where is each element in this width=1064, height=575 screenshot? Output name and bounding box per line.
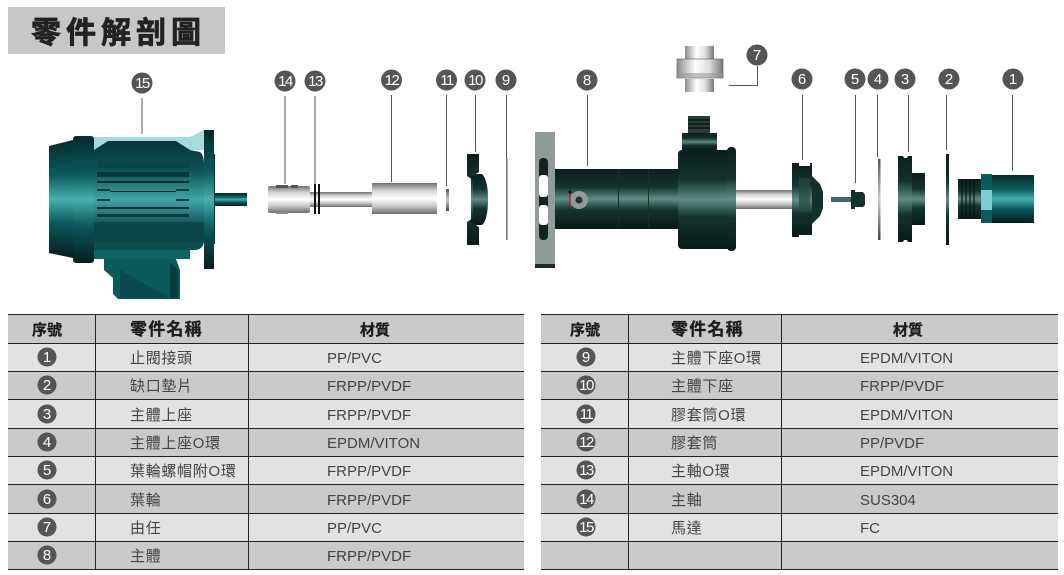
number badges: 9 (502, 72, 510, 89)
parts table: items 9 to 15: 12 (579, 434, 594, 451)
parts table: items 1 to 8: 主體上座 (130, 407, 193, 424)
part 5: impeller cap (831, 190, 865, 209)
number badges: 3 (901, 71, 909, 88)
parts table: items 1 to 8: 5 (43, 462, 51, 479)
parts table: items 1 to 8: 8 (43, 547, 51, 564)
number badges: 1 (1009, 71, 1017, 88)
number badges: 10 (468, 72, 483, 89)
parts table: items 9 to 15: 主體下座O環 (671, 350, 762, 367)
parts table: items 1 to 8: 主體上座O環 (130, 435, 221, 452)
parts table: items 9 to 15: 14 (579, 491, 594, 508)
parts table: items 1 to 8: PP/PVC (327, 520, 382, 537)
part 9: O-ring (506, 158, 508, 240)
parts table: items 1 to 8: 6 (43, 491, 51, 508)
number badges (132, 44, 1024, 94)
parts table: items 1 to 8: FRPP/PVDF (327, 548, 411, 565)
title (8, 7, 225, 54)
parts table: items 1 to 8: 2 (43, 377, 51, 394)
parts table: items 1 to 8: FRPP/PVDF (327, 463, 411, 480)
parts table: items 1 to 8: 止閥接頭 (130, 350, 193, 367)
parts table: items 9 to 15: 序號 (570, 321, 600, 339)
part 12: sleeve (372, 183, 437, 214)
number badges: 2 (945, 71, 953, 88)
part 15: motor (49, 130, 247, 299)
parts table: items 9 to 15: SUS304 (860, 492, 916, 509)
part 7: union (676, 46, 724, 92)
main shaft (310, 192, 372, 207)
parts table: items 1 to 8: 序號 (32, 321, 62, 339)
parts table: items 1 to 8: 零件名稱 (130, 320, 203, 339)
part 11: sleeve O-ring (446, 189, 449, 211)
parts table: items 9 to 15 (541, 314, 1058, 570)
part 6: impeller (792, 163, 823, 237)
part 1: valve connector (958, 174, 1034, 223)
parts table: items 9 to 15: 材質 (893, 321, 923, 339)
parts table: items 9 to 15: 主軸 (671, 492, 702, 509)
part 13: shaft O-rings (314, 184, 320, 214)
number badges: 4 (874, 71, 882, 88)
parts table: items 1 to 8: 主體 (130, 548, 161, 565)
parts table: items 9 to 15: FC (860, 520, 880, 537)
part 4: O-ring (878, 159, 880, 240)
part 3: upper base (898, 156, 925, 242)
parts table: items 1 to 8: 3 (43, 406, 51, 423)
parts table: items 9 to 15: FRPP/PVDF (860, 378, 944, 395)
pump shaft (736, 190, 792, 209)
number badges: 5 (851, 71, 859, 88)
parts table: items 1 to 8: 葉輪 (130, 492, 161, 509)
parts table: items 9 to 15: EPDM/VITON (860, 463, 953, 480)
parts table: items 1 to 8: 材質 (360, 321, 390, 339)
parts table: items 1 to 8: 4 (43, 434, 51, 451)
parts table: items 1 to 8: 缺口墊片 (130, 378, 193, 395)
parts table: items 9 to 15: 主體下座 (671, 378, 734, 395)
parts table: items 9 to 15: PP/PVDF (860, 435, 924, 452)
number badges: 8 (583, 72, 591, 89)
parts table: items 1 to 8: FRPP/PVDF (327, 492, 411, 509)
part 10: lower base (467, 154, 488, 245)
leader lines (142, 66, 1012, 186)
parts table: items 9 to 15: 膠套筒 (671, 435, 718, 452)
number badges: 6 (798, 71, 806, 88)
parts table: items 1 to 8: 葉輪螺帽附O環 (130, 463, 237, 480)
parts table: items 1 to 8: FRPP/PVDF (327, 407, 411, 424)
parts table: items 9 to 15: 13 (579, 462, 594, 479)
number badges: 12 (385, 72, 399, 89)
parts table: items 1 to 8: EPDM/VITON (327, 435, 420, 452)
part 8: pump body (535, 116, 736, 268)
part 14: shaft end (268, 185, 310, 214)
number badges: 14 (278, 73, 293, 90)
parts table: items 9 to 15: 膠套筒O環 (671, 407, 746, 424)
parts table: items 9 to 15: 主軸O環 (671, 463, 730, 480)
parts table: items 9 to 15: 11 (580, 406, 593, 423)
parts table: items 1 to 8: 1 (43, 349, 51, 366)
parts table: items 9 to 15: EPDM/VITON (860, 350, 953, 367)
parts table: items 9 to 15: 10 (579, 377, 594, 394)
part 2: notched gasket (946, 154, 949, 245)
number badges: 15 (135, 75, 150, 92)
parts table: items 9 to 15: 15 (579, 519, 594, 536)
parts table: items 1 to 8: 由任 (130, 520, 161, 537)
title: 零件解剖圖 (31, 17, 206, 50)
number badges: 11 (440, 72, 454, 89)
parts table: items 1 to 8: FRPP/PVDF (327, 378, 411, 395)
parts table: items 9 to 15: EPDM/VITON (860, 407, 953, 424)
exploded pump diagram (49, 46, 1034, 299)
parts table: items 9 to 15: 9 (582, 349, 590, 366)
parts table: items 9 to 15: 馬達 (671, 520, 702, 537)
parts table: items 1 to 8: 7 (43, 519, 51, 536)
parts table: items 1 to 8: PP/PVC (327, 350, 382, 367)
parts table: items 9 to 15: 零件名稱 (671, 320, 744, 339)
number badges: 13 (308, 73, 323, 90)
parts table: items 1 to 8 (8, 314, 524, 570)
number badges: 7 (753, 47, 761, 64)
